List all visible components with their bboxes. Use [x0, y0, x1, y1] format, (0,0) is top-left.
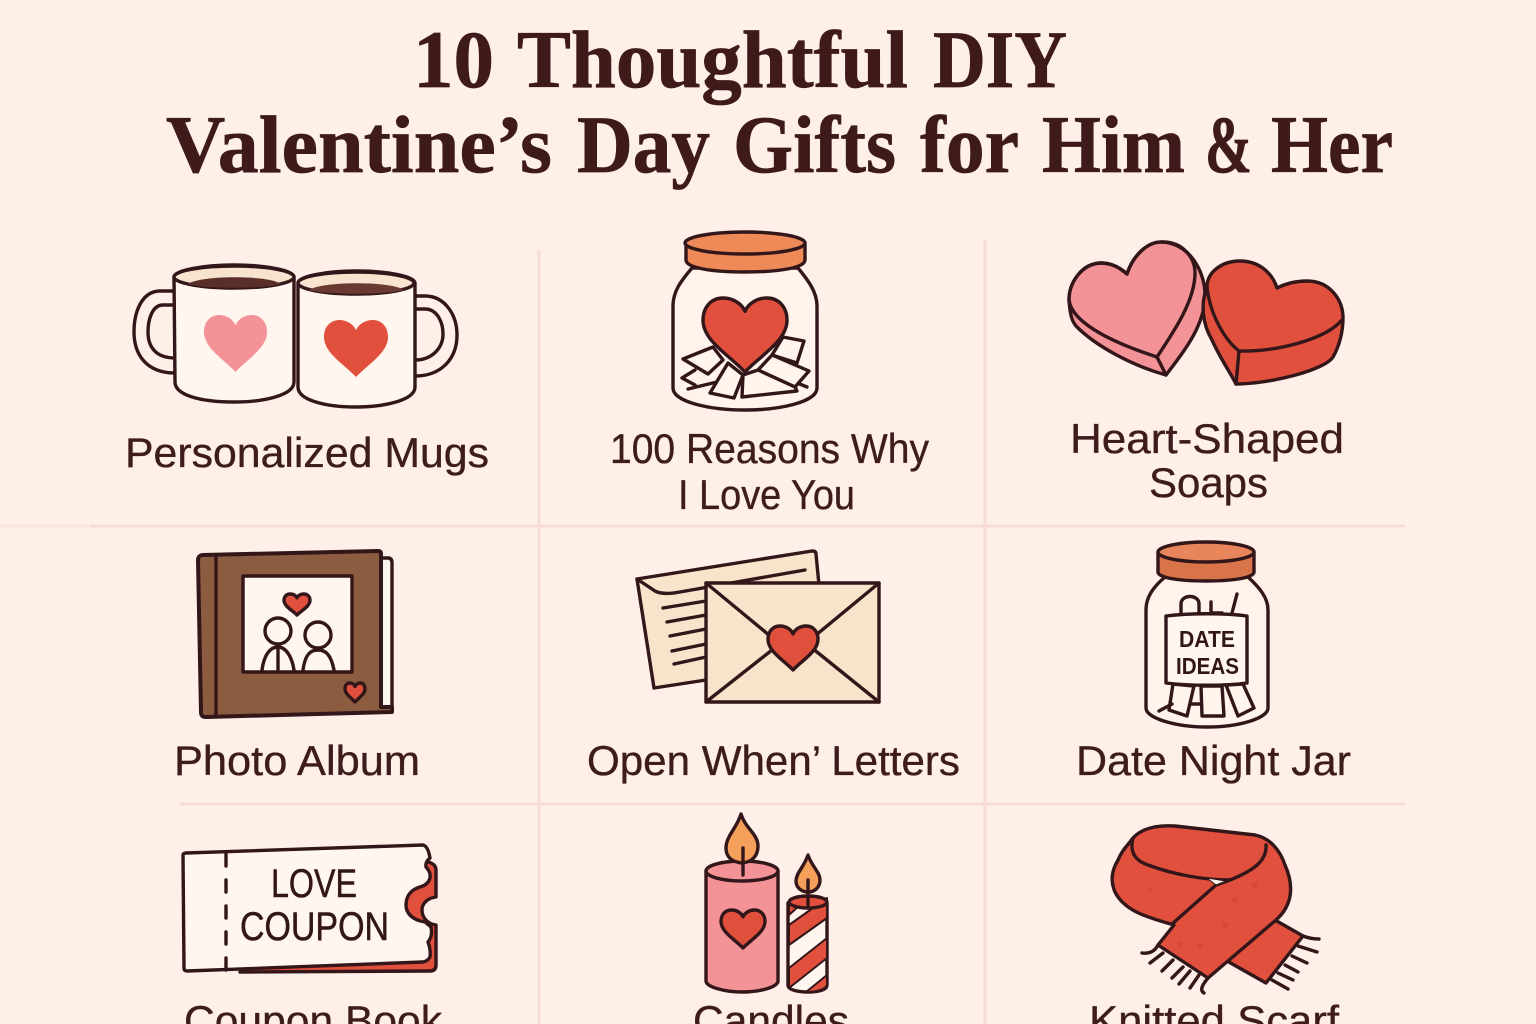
icon: date night jar: DATE [1179, 626, 1235, 652]
icon: date night jar: IDEAS [1176, 653, 1239, 679]
icon: heart-shaped soaps [1069, 242, 1343, 384]
label: heart-shaped soaps [1070, 415, 1344, 506]
icon: love coupon: LOVE [271, 862, 357, 906]
icon: candles [706, 814, 827, 992]
label: personalized mugs: Personalized Mugs [125, 429, 489, 476]
title: for [920, 99, 1019, 190]
label: heart-shaped soaps: Heart-Shaped [1070, 415, 1344, 462]
title: Him [1042, 99, 1185, 190]
label: 100 reasons why i love you: 100 Reasons Why [610, 425, 929, 472]
title: Day [577, 99, 710, 190]
label: 100 reasons why i love you: I Love You [678, 471, 855, 518]
title: Her [1271, 99, 1393, 190]
title: 10 [413, 14, 494, 105]
icon: personalized mugs [134, 265, 457, 407]
title: DIY [933, 14, 1067, 105]
icon: 100 reasons jar [673, 232, 817, 410]
label: date night jar: Date Night Jar [1076, 737, 1351, 784]
icon: date night jar [1146, 542, 1268, 727]
icon: love coupon [183, 845, 436, 972]
title: Gifts [733, 99, 896, 190]
label: heart-shaped soaps: Soaps [1149, 459, 1268, 506]
icon: photo album [198, 551, 392, 717]
label: open when letters: Open When’ Letters [587, 737, 960, 784]
title: Thoughtful [517, 14, 908, 105]
title [166, 14, 1393, 190]
title: & [1205, 99, 1252, 190]
icon: love coupon: COUPON [240, 905, 389, 949]
icon: open when letters [637, 551, 879, 702]
label: photo album: Photo Album [174, 737, 420, 784]
icon: knitted scarf [1112, 826, 1319, 993]
title: Valentine’s [166, 99, 552, 190]
label: 100 reasons why i love you [610, 425, 929, 518]
